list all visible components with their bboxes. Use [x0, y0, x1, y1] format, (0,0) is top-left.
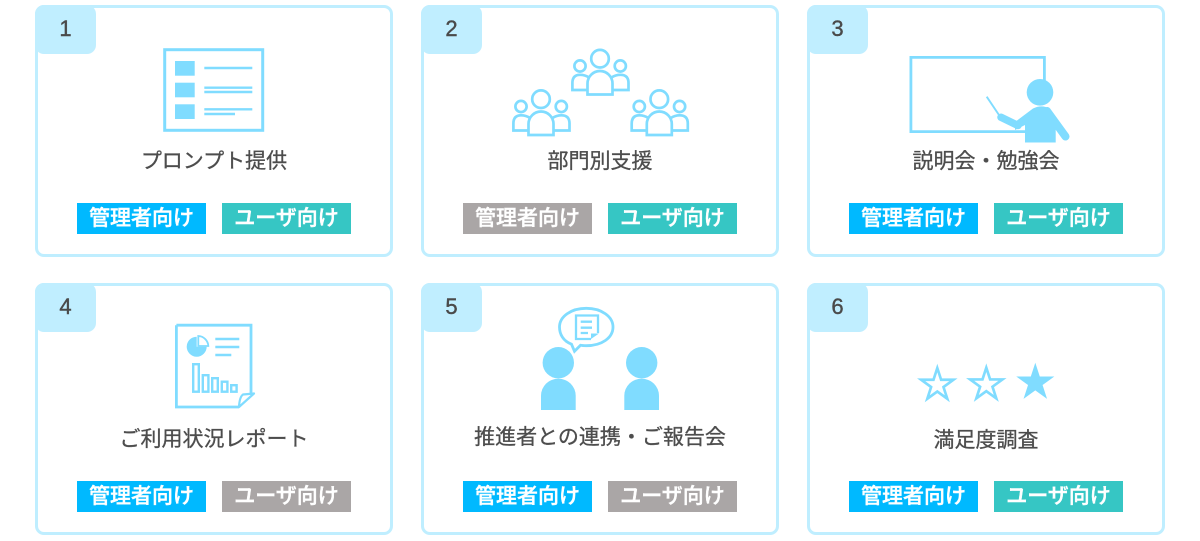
tag: user	[994, 481, 1123, 512]
number badge 2: 2	[445, 16, 458, 41]
tag: admin: 管理者向け	[89, 485, 194, 508]
tag: admin: 管理者向け	[475, 485, 580, 508]
heading: 推進者との連携・ご報告会	[474, 426, 726, 449]
tag: user	[608, 203, 737, 234]
panel: usage report	[35, 283, 393, 535]
tag: admin	[463, 481, 592, 512]
tag: user: ユーザ向け	[620, 207, 725, 230]
icon: presenter at whiteboard	[910, 56, 1070, 142]
heading: 部門別支援	[548, 150, 652, 173]
tag: user	[608, 481, 737, 512]
heading: ご利用状況レポート	[120, 428, 308, 451]
tag: admin	[849, 203, 978, 234]
number badge 3	[807, 5, 868, 54]
tag: admin: 管理者向け	[475, 207, 580, 230]
number badge 5: 5	[445, 294, 458, 319]
tag: user	[222, 203, 351, 234]
number badge 6: 6	[831, 294, 844, 319]
icon: document list	[163, 48, 264, 132]
number badge 1: 1	[59, 16, 72, 41]
number badge 5	[421, 283, 482, 332]
tag: admin	[849, 481, 978, 512]
tag: user: ユーザ向け	[234, 485, 339, 508]
panel: liaison and report meeting	[421, 283, 779, 535]
tag: admin	[463, 203, 592, 234]
tag: admin	[77, 203, 206, 234]
heading: 説明会・勉強会	[912, 150, 1060, 173]
panel: satisfaction survey	[807, 283, 1165, 535]
tag: user: ユーザ向け	[234, 207, 339, 230]
number badge 2	[421, 5, 482, 54]
tag: admin: 管理者向け	[861, 485, 966, 508]
icon: two people with speech bubble	[541, 306, 659, 410]
heading: プロンプト提供	[141, 150, 287, 173]
tag: user: ユーザ向け	[620, 485, 725, 508]
number badge 6	[807, 283, 868, 332]
panel: department support	[421, 5, 779, 257]
icon: three groups of people	[512, 48, 690, 136]
number badge 4	[35, 283, 96, 332]
tag: user: ユーザ向け	[1006, 207, 1111, 230]
panel: briefing and study session	[807, 5, 1165, 257]
number badge 1	[35, 5, 96, 54]
panel: prompt provision	[35, 5, 393, 257]
tag: admin	[77, 481, 206, 512]
icon: three stars	[917, 362, 1054, 402]
tag: user: ユーザ向け	[1006, 485, 1111, 508]
heading: 満足度調査	[934, 429, 1038, 452]
number badge 3: 3	[831, 16, 844, 41]
tag: user	[222, 481, 351, 512]
tag: admin: 管理者向け	[861, 207, 966, 230]
tag: user	[994, 203, 1123, 234]
number badge 4: 4	[59, 294, 72, 319]
tag: admin: 管理者向け	[89, 207, 194, 230]
icon: report document with charts	[175, 324, 256, 408]
